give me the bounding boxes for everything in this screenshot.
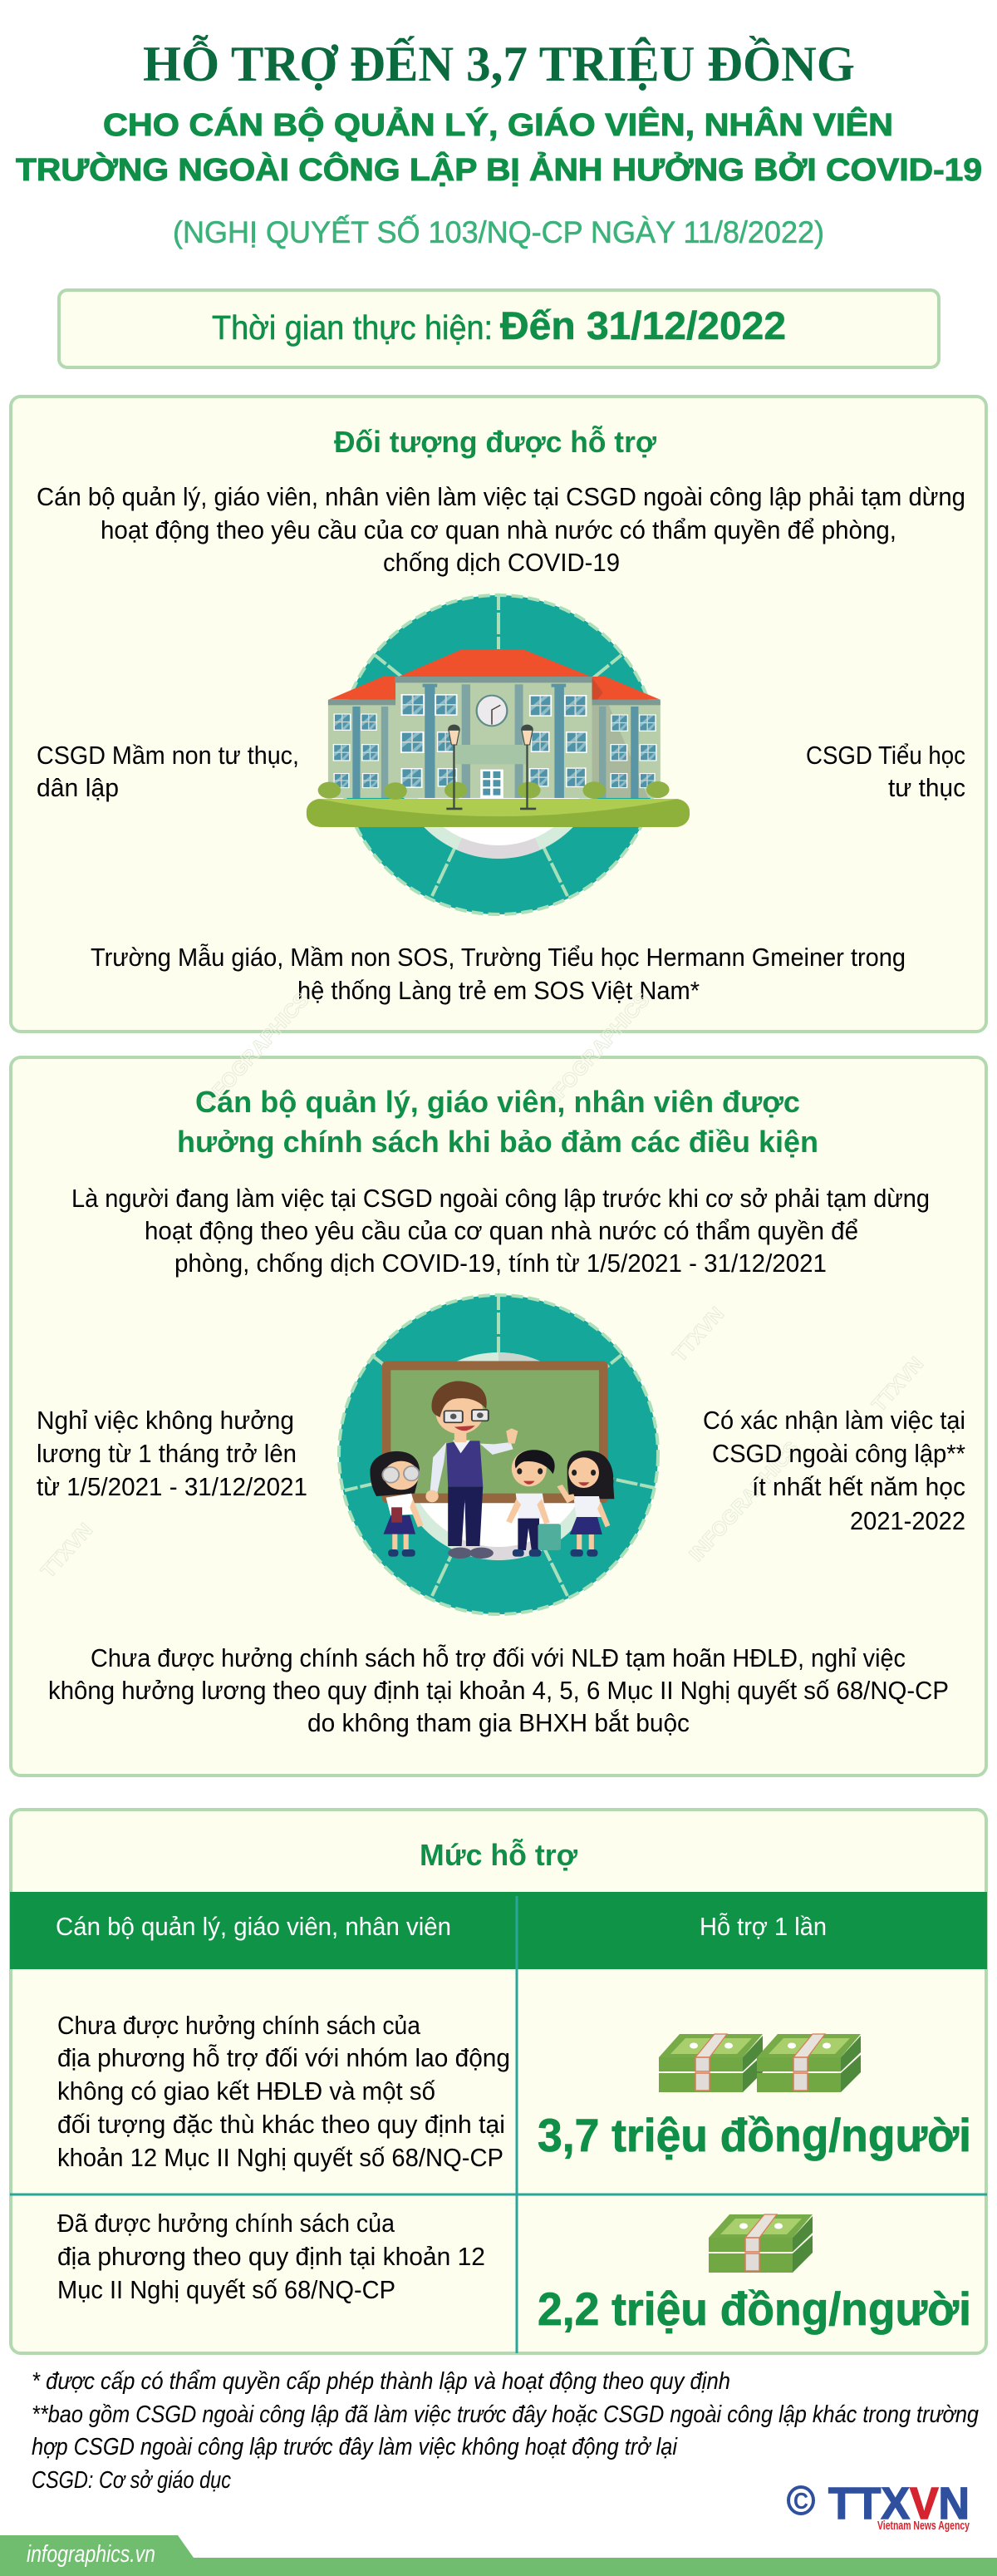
heading: Mức hỗ trợ <box>420 1838 577 1872</box>
label: preschools: dân lập <box>37 773 119 802</box>
heading <box>177 1085 818 1159</box>
label: primary schools <box>806 741 965 802</box>
amount 3.7 million: 3,7 triệu đồng/người <box>538 2109 971 2161</box>
footer band <box>0 2535 997 2576</box>
table header <box>10 1892 987 1969</box>
watermark: TTXVN <box>668 1303 729 1367</box>
table header: Cán bộ quản lý, giáo viên, nhân viên <box>56 1912 451 1941</box>
footnotes <box>32 2368 979 2494</box>
watermark: INFOGRAPHICS <box>535 988 655 1117</box>
icon: teacher and pupils on teal circle <box>339 1295 658 1614</box>
condition text: unpaid leave: từ 1/5/2021 - 31/12/2021 <box>37 1472 307 1501</box>
row 1 description: địa phương hỗ trợ đối với nhóm lao động <box>57 2043 510 2072</box>
footnotes: hợp CSGD ngoài công lập trước đây làm việc không hoạt động trở lại <box>32 2434 678 2460</box>
watermark <box>37 988 928 1583</box>
footnotes: * được cấp có thẩm quyền cấp phép thành lập và hoạt động theo quy định <box>32 2368 730 2395</box>
label: preschools <box>37 741 299 802</box>
row 2 description <box>57 2209 485 2304</box>
logo: TTXVN: C <box>793 2488 808 2514</box>
icon: school on teal circle <box>307 595 690 914</box>
icon: two money stacks <box>659 2034 861 2092</box>
condition text: employment <box>71 1184 930 1278</box>
intro text: Cán bộ quản lý, giáo viên, nhân viên làm việc tại CSGD ngoài công lập phải tạm dừng <box>37 482 965 511</box>
footer band: infographics.vn <box>27 2541 155 2568</box>
label: primary schools: CSGD Tiểu học <box>806 741 965 770</box>
boy <box>506 1450 561 1557</box>
condition text: no prior support <box>48 1643 949 1737</box>
intro text <box>37 482 965 577</box>
teacher <box>425 1382 518 1559</box>
watermark: INFOGRAPHICS <box>194 988 314 1117</box>
condition text: employment: Là người đang làm việc tại CSGD ngoài công lập trước khi cơ sở phải tạm dừng <box>71 1184 930 1213</box>
row 2 description: địa phương theo quy định tại khoản 12 <box>57 2242 485 2271</box>
label: SOS schools: Trường Mẫu giáo, Mầm non SOS, Trường Tiểu học Hermann Gmeiner trong <box>91 943 906 972</box>
title: HỖ TRỢ ĐẾN 3,7 TRIỆU ĐỒNG <box>143 36 855 91</box>
heading: hưởng chính sách khi bảo đảm các điều kiện <box>177 1125 818 1159</box>
row 1 description: khoản 12 Mục II Nghị quyết số 68/NQ-CP <box>57 2143 503 2172</box>
heading: Đối tượng được hỗ trợ <box>334 425 656 459</box>
condition text: unpaid leave: Nghỉ việc không hưởng <box>37 1406 294 1435</box>
logo: TTXVN: TTXVN <box>828 2479 970 2529</box>
condition text: work confirmation: 2021-2022 <box>850 1506 965 1535</box>
condition text: no prior support: không hưởng lương theo quy định tại khoản 4, 5, 6 Mục II Nghị quyết số 68/NQ-CP <box>48 1676 949 1705</box>
row 2 description: Mục II Nghị quyết số 68/NQ-CP <box>57 2275 395 2304</box>
footnotes: CSGD: Cơ sở giáo dục <box>32 2467 231 2494</box>
label: SOS schools: hệ thống Làng trẻ em SOS Việt Nam* <box>297 976 700 1005</box>
label: primary schools: tư thục <box>888 773 965 802</box>
row 2 description: Đã được hưởng chính sách của <box>57 2209 395 2238</box>
condition text: work confirmation <box>703 1406 965 1535</box>
time label: Thời gian thực hiện: <box>212 308 493 347</box>
time value: Đến 31/12/2022 <box>500 303 786 347</box>
condition text: work confirmation: Có xác nhận làm việc tại <box>703 1406 965 1435</box>
row 1 description: không có giao kết HĐLĐ và một số <box>57 2076 435 2106</box>
condition text: employment: hoạt động theo yêu cầu của cơ quan nhà nước có thẩm quyền để <box>145 1216 858 1245</box>
row 1 description: đối tượng đặc thù khác theo quy định tại <box>57 2110 505 2139</box>
watermark: TTXVN <box>867 1352 928 1416</box>
subtitle line 1: CHO CÁN BỘ QUẢN LÝ, GIÁO VIÊN, NHÂN VIÊN <box>103 106 893 143</box>
panel: beneficiaries <box>11 396 986 1032</box>
condition text: unpaid leave: lương từ 1 tháng trở lên <box>37 1439 297 1468</box>
condition text: no prior support: do không tham gia BHXH bắt buộc <box>307 1708 690 1737</box>
intro text: hoạt động theo yêu cầu của cơ quan nhà nước có thẩm quyền để phòng, <box>101 515 896 544</box>
girl with glasses <box>370 1451 424 1557</box>
condition text: no prior support: Chưa được hưởng chính sách hỗ trợ đối với NLĐ tạm hoãn HĐLĐ, nghỉ việc <box>91 1643 906 1672</box>
condition text: unpaid leave <box>37 1406 307 1501</box>
watermark: TTXVN <box>37 1519 97 1583</box>
resolution reference: (NGHỊ QUYẾT SỐ 103/NQ-CP NGÀY 11/8/2022) <box>173 214 824 249</box>
panel: implementation time <box>59 290 939 367</box>
row 1 description <box>57 2011 510 2172</box>
heading: Cán bộ quản lý, giáo viên, nhân viên được <box>195 1085 800 1119</box>
row 1 description: Chưa được hưởng chính sách của <box>57 2011 421 2040</box>
intro text: chống dịch COVID-19 <box>383 548 620 577</box>
condition text: employment: phòng, chống dịch COVID-19, tính từ 1/5/2021 - 31/12/2021 <box>174 1249 827 1278</box>
amount 2.2 million: 2,2 triệu đồng/người <box>538 2283 971 2335</box>
label: preschools: CSGD Mầm non tư thục, <box>37 741 299 770</box>
watermark: INFOGRAPHICS <box>685 1437 804 1566</box>
blackboard <box>382 1361 608 1503</box>
panel: support levels table <box>10 1810 987 2353</box>
girl with long hair <box>557 1451 614 1557</box>
panel: conditions <box>11 988 986 1776</box>
label: SOS schools <box>91 943 906 1005</box>
subtitle line 2: TRƯỜNG NGOÀI CÔNG LẬP BỊ ẢNH HƯỞNG BỞI COVID-19 <box>16 150 982 188</box>
icon: money stack <box>709 2214 813 2273</box>
table header: Hỗ trợ 1 lần <box>700 1912 827 1941</box>
condition text: work confirmation: CSGD ngoài công lập** <box>712 1439 965 1468</box>
condition text: work confirmation: ít nhất hết năm học <box>752 1472 965 1501</box>
